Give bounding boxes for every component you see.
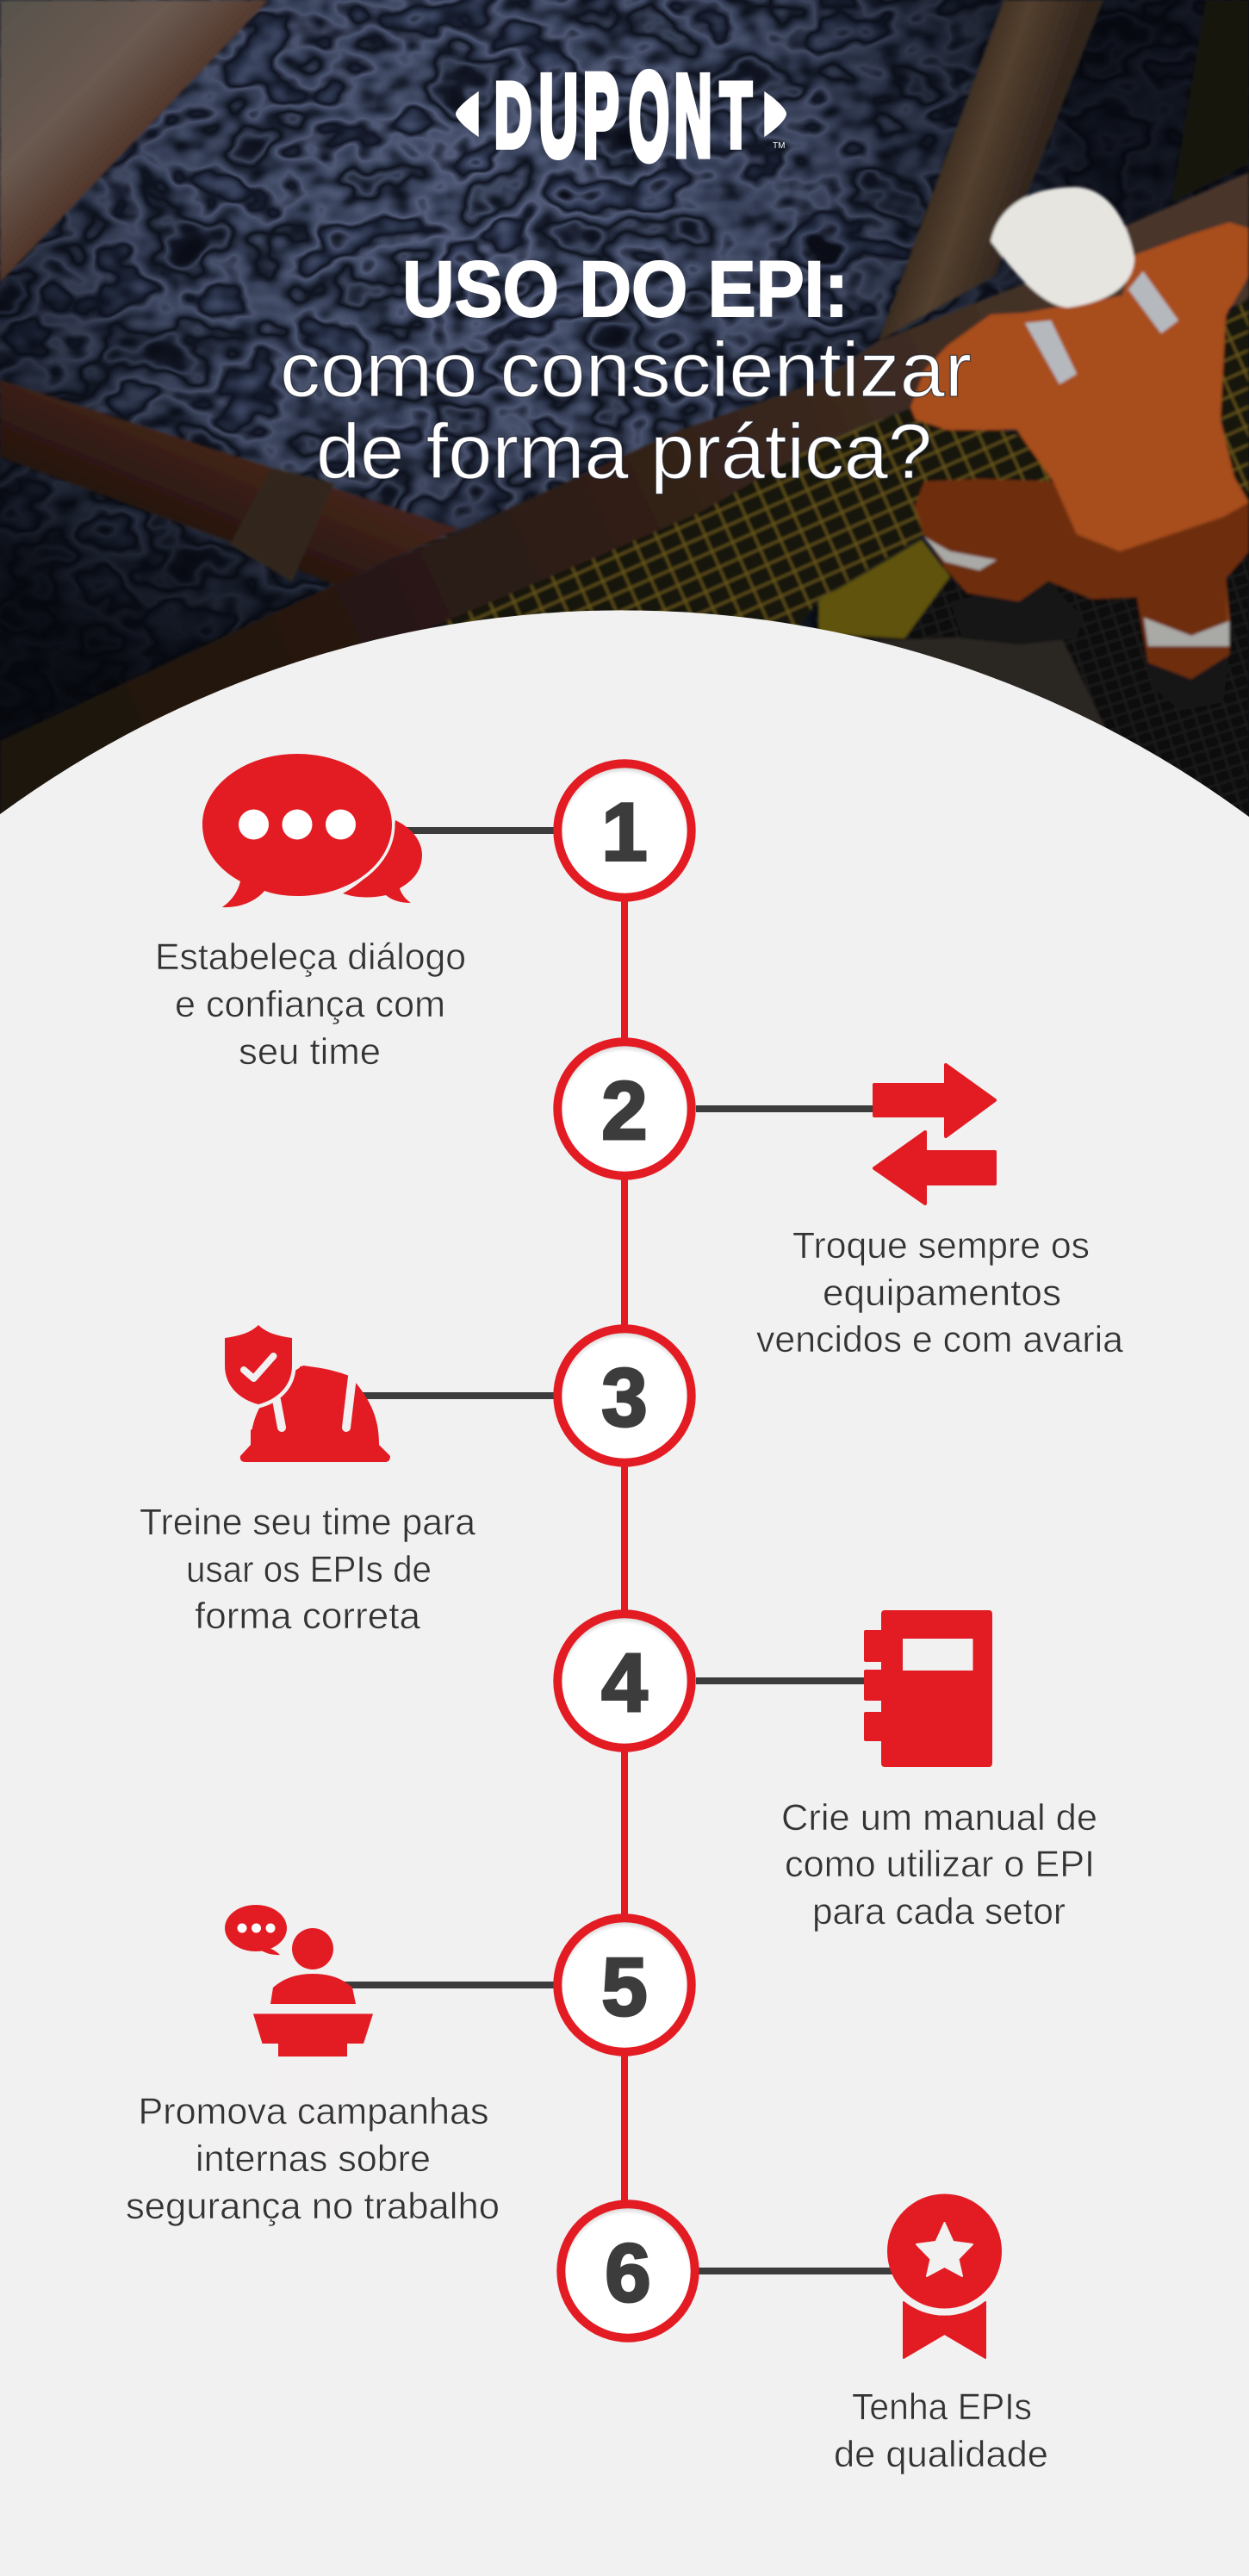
number circle 1 — [557, 763, 692, 898]
icon: manual notebook — [864, 1610, 992, 1767]
text: step 2: Troque sempre os — [792, 1225, 1090, 1266]
text: step 3 — [140, 1502, 475, 1637]
text: step 4: como utilizar o EPI — [785, 1844, 1095, 1885]
number circle 6: 6 — [605, 2227, 651, 2319]
icon: quality medal — [887, 2193, 1002, 2358]
text: step 3: usar os EPIs de — [186, 1549, 432, 1590]
logo right wedge — [764, 91, 786, 137]
text: step 1: e confiança com — [175, 984, 445, 1025]
text: step 6: de qualidade — [834, 2434, 1048, 2475]
logo letters: P — [583, 51, 618, 182]
title line 2: como conscientizar — [280, 327, 972, 414]
step 4 — [557, 1610, 1097, 1932]
hero photo: worker on offshore platform — [0, 0, 1249, 844]
text: step 1: Estabeleça diálogo — [155, 936, 466, 978]
text: step 3: Treine seu time para — [140, 1502, 475, 1543]
text: step 3: forma correta — [195, 1596, 420, 1637]
logo trademark: TM — [773, 141, 785, 151]
number circle 2: 2 — [601, 1065, 648, 1157]
number circle 2 — [557, 1042, 692, 1176]
logo letters — [494, 48, 752, 185]
timeline vertical line — [621, 831, 628, 2206]
text: step 5 — [126, 2091, 500, 2227]
text: step 1: seu time — [239, 1031, 381, 1073]
text: step 6 — [834, 2386, 1048, 2475]
number circle 4 — [557, 1614, 692, 1748]
logo letters: O — [629, 48, 669, 185]
text: step 5: internas sobre — [196, 2138, 431, 2180]
number circle 5: 5 — [601, 1941, 648, 2033]
text: step 4 — [781, 1797, 1097, 1932]
icon: shield and helmet — [225, 1325, 390, 1462]
number circle 4: 4 — [601, 1637, 648, 1729]
step 1 — [155, 754, 692, 1073]
connector lines — [339, 831, 900, 2271]
logo letters: U — [539, 52, 578, 179]
step 3 — [140, 1325, 692, 1637]
text: step 2 — [756, 1225, 1123, 1360]
step 6 — [561, 2193, 1048, 2475]
logo: DuPont — [456, 48, 786, 185]
logo left wedge — [456, 91, 479, 137]
step 5 — [126, 1905, 692, 2227]
text: step 6: Tenha EPIs — [852, 2386, 1032, 2428]
icon: speaker at podium — [225, 1905, 373, 2148]
number circle 5 — [557, 1918, 692, 2052]
logo letters: D — [494, 65, 531, 166]
icon: exchange arrows — [874, 1065, 995, 1204]
number circle 1: 1 — [601, 786, 648, 879]
number circle 3 — [557, 1328, 692, 1463]
text: step 4: Crie um manual de — [781, 1797, 1097, 1839]
number circle 6 — [561, 2204, 695, 2338]
text: step 5: segurança no trabalho — [126, 2186, 500, 2227]
title — [280, 246, 972, 495]
title line 3: de forma prática? — [316, 409, 932, 495]
text: step 2: equipamentos — [823, 1272, 1061, 1314]
text: step 5: Promova campanhas — [138, 2091, 489, 2132]
text: step 2: vencidos e com avaria — [756, 1319, 1123, 1360]
text: step 4: para cada setor — [812, 1891, 1066, 1932]
curved light panel — [0, 610, 1249, 2576]
number circle 3: 3 — [601, 1352, 648, 1444]
icon: speech bubbles — [202, 754, 422, 907]
title line 1: USO DO EPI: — [402, 246, 848, 333]
logo letters: T — [720, 65, 752, 166]
text: step 1 — [155, 936, 466, 1073]
logo letters: N — [674, 52, 711, 179]
step 2 — [557, 1042, 1123, 1360]
